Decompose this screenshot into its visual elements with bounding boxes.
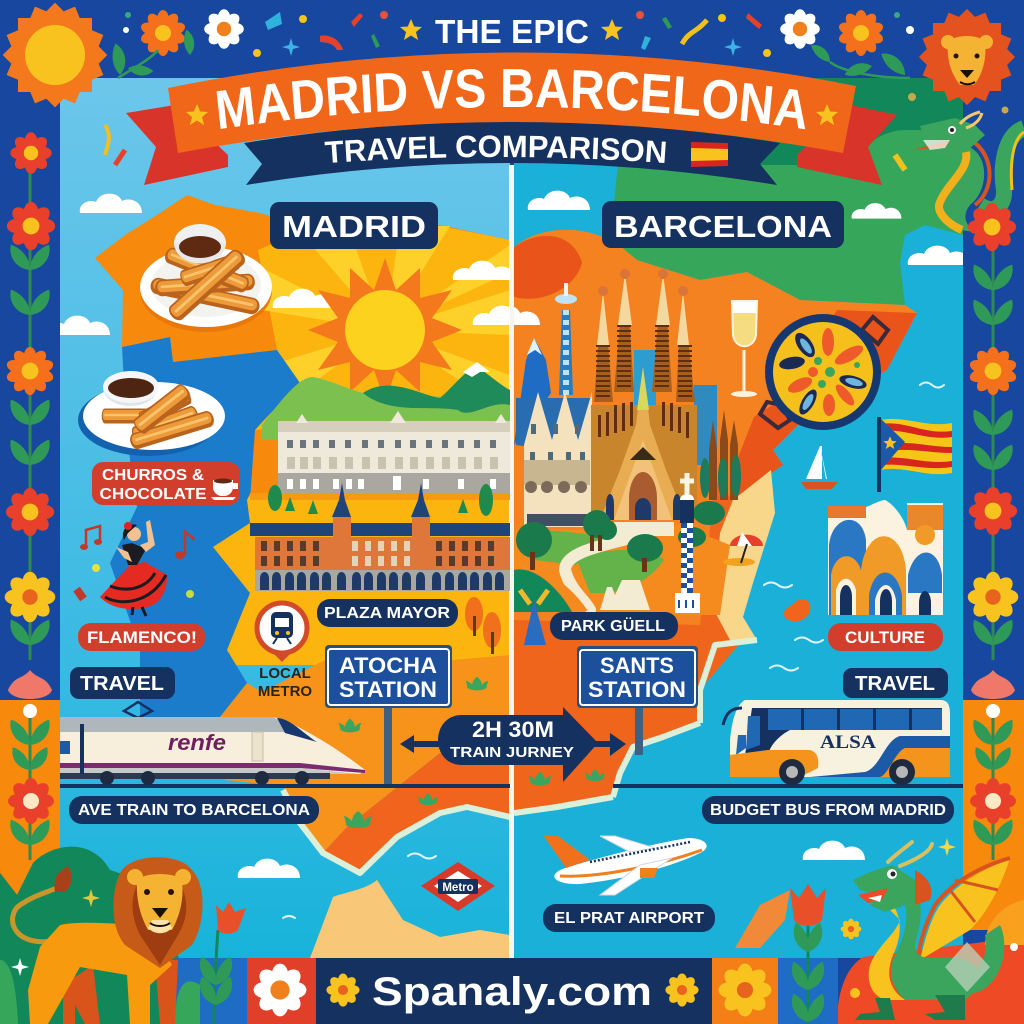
label: churros and chocolate: CHURROS & bbox=[102, 467, 204, 484]
bottom-left orange corner strip bbox=[0, 700, 60, 895]
illustration: royal palace bbox=[250, 411, 510, 516]
railway track bbox=[60, 784, 963, 788]
left ribbon tail bbox=[126, 105, 228, 185]
subtitle: TRAVEL COMPARISON bbox=[324, 135, 666, 163]
heading: Madrid: MADRID bbox=[282, 209, 426, 244]
bottom tulips bbox=[192, 884, 832, 1024]
illustration: Renfe train: renfe bbox=[168, 730, 226, 755]
footer bar bbox=[247, 958, 838, 1024]
clouds bbox=[48, 191, 970, 878]
icon: local metro: METRO bbox=[258, 683, 312, 700]
icon: small shrubs bbox=[339, 677, 605, 828]
panel: Madrid map bbox=[60, 78, 510, 958]
title: The Epic: THE EPIC bbox=[435, 13, 589, 50]
title banner bbox=[126, 52, 897, 185]
illustration: dragon bottom bbox=[837, 842, 1024, 1024]
banner stars bbox=[186, 104, 838, 125]
icon: Metro sign bbox=[421, 862, 495, 911]
icon: Metro sign: Metro bbox=[442, 882, 474, 894]
callout: journey time arrow: 2H 30M bbox=[472, 717, 554, 742]
label: Park Guell: PARK GÜELL bbox=[561, 616, 665, 635]
label: churros and chocolate: CHOCOLATE bbox=[100, 486, 206, 503]
icon: lion top right bbox=[919, 9, 1015, 105]
label: Plaza Mayor: PLAZA MAYOR bbox=[324, 605, 450, 622]
label: El Prat: EL PRAT AIRPORT bbox=[554, 910, 704, 927]
illustration: ALSA bus bbox=[723, 700, 950, 785]
main title: MADRID VS BARCELONA bbox=[216, 69, 806, 130]
left floral column bbox=[4, 132, 56, 860]
illustration: airplane bbox=[543, 835, 707, 895]
label: Budget bus: BUDGET BUS FROM MADRID bbox=[710, 802, 946, 819]
illustration: lion bbox=[0, 847, 248, 1024]
footer bar: Spanaly.com bbox=[372, 970, 652, 1014]
label: Culture bbox=[828, 623, 943, 651]
label: Park Guell bbox=[550, 612, 678, 640]
icon: small flower and sparkle near dragon bbox=[841, 838, 956, 939]
illustration: Gothic cathedral bbox=[516, 392, 592, 527]
illustration: sea waves bbox=[283, 382, 944, 918]
label: Budget bus bbox=[702, 796, 954, 824]
label: Travel right bbox=[843, 668, 948, 698]
sign: Atocha Station: STATION bbox=[339, 677, 437, 702]
label: Culture: CULTURE bbox=[845, 628, 925, 647]
sign: Sants Station: SANTS bbox=[600, 653, 674, 678]
right floral column bbox=[967, 203, 1019, 860]
callout: journey time arrow: TRAIN JURNEY bbox=[450, 744, 574, 761]
icon: Catalan flag bbox=[877, 417, 952, 492]
right ribbon tail bbox=[797, 105, 897, 185]
illustration: Park Guell garden bbox=[514, 473, 730, 645]
sign: Sants Station: STATION bbox=[588, 677, 686, 702]
icon: sun Madrid bbox=[308, 258, 462, 402]
illustration: paella bbox=[760, 314, 888, 430]
label: Travel right: TRAVEL bbox=[855, 673, 935, 695]
illustration: autumn trees near Plaza Mayor bbox=[465, 597, 501, 654]
heading: Barcelona: BARCELONA bbox=[614, 209, 832, 244]
label: AVE train bbox=[69, 796, 319, 824]
icon: music notes and confetti by dancer bbox=[73, 526, 194, 601]
label: El Prat bbox=[543, 904, 715, 932]
icon: local metro: LOCAL bbox=[259, 665, 311, 682]
illustration: top churros plate bbox=[140, 224, 272, 332]
illustration: Plaza Mayor bbox=[250, 483, 510, 591]
heading: Madrid bbox=[270, 202, 438, 249]
bottom-right orange corner strip bbox=[963, 700, 1024, 930]
sign: Atocha Station: ATOCHA bbox=[339, 653, 437, 678]
illustration: ALSA bus: ALSA bbox=[820, 732, 876, 753]
label: Travel left bbox=[70, 667, 175, 699]
icon: Spanish flag bbox=[691, 142, 728, 167]
sign: Atocha Station bbox=[325, 645, 452, 785]
illustration: Sagrada Familia bbox=[591, 269, 741, 520]
icon: green hills and snow peak bbox=[262, 362, 510, 440]
illustration: blue mountain and communications tower bbox=[514, 283, 577, 445]
icon: sailboat bbox=[801, 446, 838, 489]
label: Plaza Mayor bbox=[317, 599, 458, 627]
top floral decoration and confetti bbox=[105, 9, 1008, 170]
navy subtitle ribbon bbox=[244, 122, 780, 185]
illustration: Renfe train bbox=[60, 702, 365, 785]
illustration: beach umbrella bbox=[723, 532, 763, 566]
orange main ribbon bbox=[168, 52, 856, 153]
panel: Barcelona map bbox=[514, 78, 963, 958]
icon: sun top left bbox=[3, 3, 107, 107]
label: AVE train: AVE TRAIN TO BARCELONA bbox=[78, 802, 310, 819]
illustration: dragon top right bbox=[912, 112, 1024, 232]
callout: journey time arrow bbox=[400, 707, 626, 782]
label: Flamenco: FLAMENCO! bbox=[87, 628, 197, 647]
illustration: flamenco dancer bbox=[100, 520, 167, 616]
label: Travel left: TRAVEL bbox=[80, 673, 164, 695]
heading: Barcelona bbox=[602, 201, 844, 248]
label: churros and chocolate bbox=[92, 462, 240, 505]
sign: Sants Station bbox=[577, 646, 698, 755]
centre divider bbox=[509, 165, 514, 958]
illustration: lower churros plate bbox=[78, 371, 225, 456]
label: Flamenco bbox=[78, 623, 205, 651]
illustration: Gaudi arches bbox=[828, 500, 943, 615]
icon: champagne glass bbox=[731, 301, 757, 397]
icon: local metro bbox=[257, 603, 312, 700]
